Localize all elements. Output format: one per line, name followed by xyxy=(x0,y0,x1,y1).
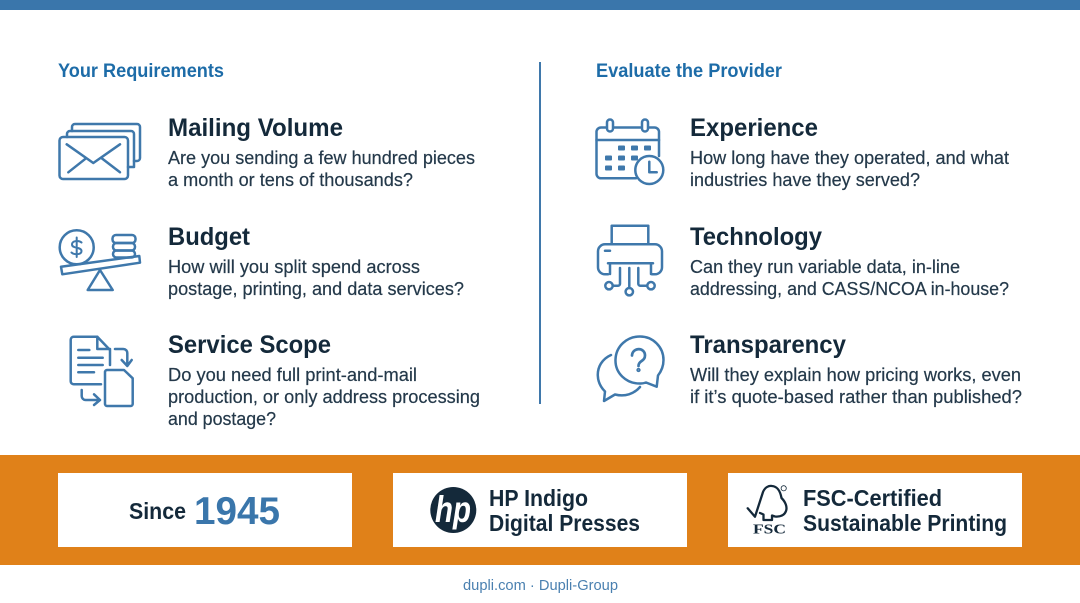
top bar xyxy=(0,0,1080,10)
icon: printer with circuit lines xyxy=(598,226,662,295)
icon: fsc tree logo: FSC xyxy=(753,522,786,538)
item: transparency: Will they explain how pricing works, even xyxy=(690,364,1021,385)
footer: dupli.com · Dupli-Group xyxy=(463,577,618,594)
item: transparency: if it’s quote-based rather than published? xyxy=(690,386,1022,407)
item: budget xyxy=(168,223,464,299)
card: hp indigo: HP Indigo xyxy=(489,485,588,511)
icon: stacked envelopes xyxy=(60,124,140,179)
panel: evaluate the provider xyxy=(596,61,1022,407)
icon: balance scale with coin and stack xyxy=(60,230,140,290)
item: mailing volume: a month or tens of thousands? xyxy=(168,169,413,190)
card: since 1945: Since xyxy=(129,498,186,524)
card: hp indigo xyxy=(393,473,687,547)
item: service scope: and postage? xyxy=(168,408,276,429)
panel: your requirements xyxy=(58,61,480,429)
item: experience: How long have they operated, and what xyxy=(690,147,1009,168)
item: budget: How will you split spend across xyxy=(168,256,420,277)
item: service scope: Do you need full print-and-mail xyxy=(168,364,417,385)
icon: hp logo: hp xyxy=(435,489,471,530)
item: budget: postage, printing, and data services? xyxy=(168,278,464,299)
card: hp indigo: Digital Presses xyxy=(489,510,640,536)
item: technology xyxy=(690,223,1009,299)
card: fsc certified: FSC-Certified xyxy=(803,485,942,511)
item: budget: Budget xyxy=(168,223,251,251)
item: experience: Experience xyxy=(690,114,818,142)
item: transparency: Transparency xyxy=(690,331,846,359)
icon: fsc tree logo xyxy=(748,486,786,538)
item: transparency xyxy=(690,331,1022,407)
card: fsc certified: Sustainable Printing xyxy=(803,510,1007,536)
item: mailing volume: Mailing Volume xyxy=(168,114,343,142)
item: service scope: production, or only address processing xyxy=(168,386,480,407)
heading: your requirements: Your Requirements xyxy=(58,61,224,82)
item: technology: Technology xyxy=(690,223,822,251)
item: experience: industries have they served? xyxy=(690,169,920,190)
heading: evaluate the provider: Evaluate the Provider xyxy=(596,61,783,82)
icon: documents with arrows xyxy=(71,337,133,406)
item: technology: addressing, and CASS/NCOA in-house? xyxy=(690,278,1009,299)
item: service scope xyxy=(168,331,480,429)
item: technology: Can they run variable data, in-line xyxy=(690,256,960,277)
item: experience xyxy=(690,114,1009,190)
item: service scope: Service Scope xyxy=(168,331,331,359)
item: mailing volume: Are you sending a few hundred pieces xyxy=(168,147,475,168)
card: since 1945: 1945 xyxy=(194,490,280,533)
icon: speech bubbles with question mark xyxy=(598,336,664,401)
item: mailing volume xyxy=(168,114,475,190)
panel: credentials band xyxy=(0,455,1080,565)
card: since 1945 xyxy=(58,473,352,547)
icon: calendar with clock xyxy=(596,120,663,184)
card: fsc certified xyxy=(728,473,1022,547)
